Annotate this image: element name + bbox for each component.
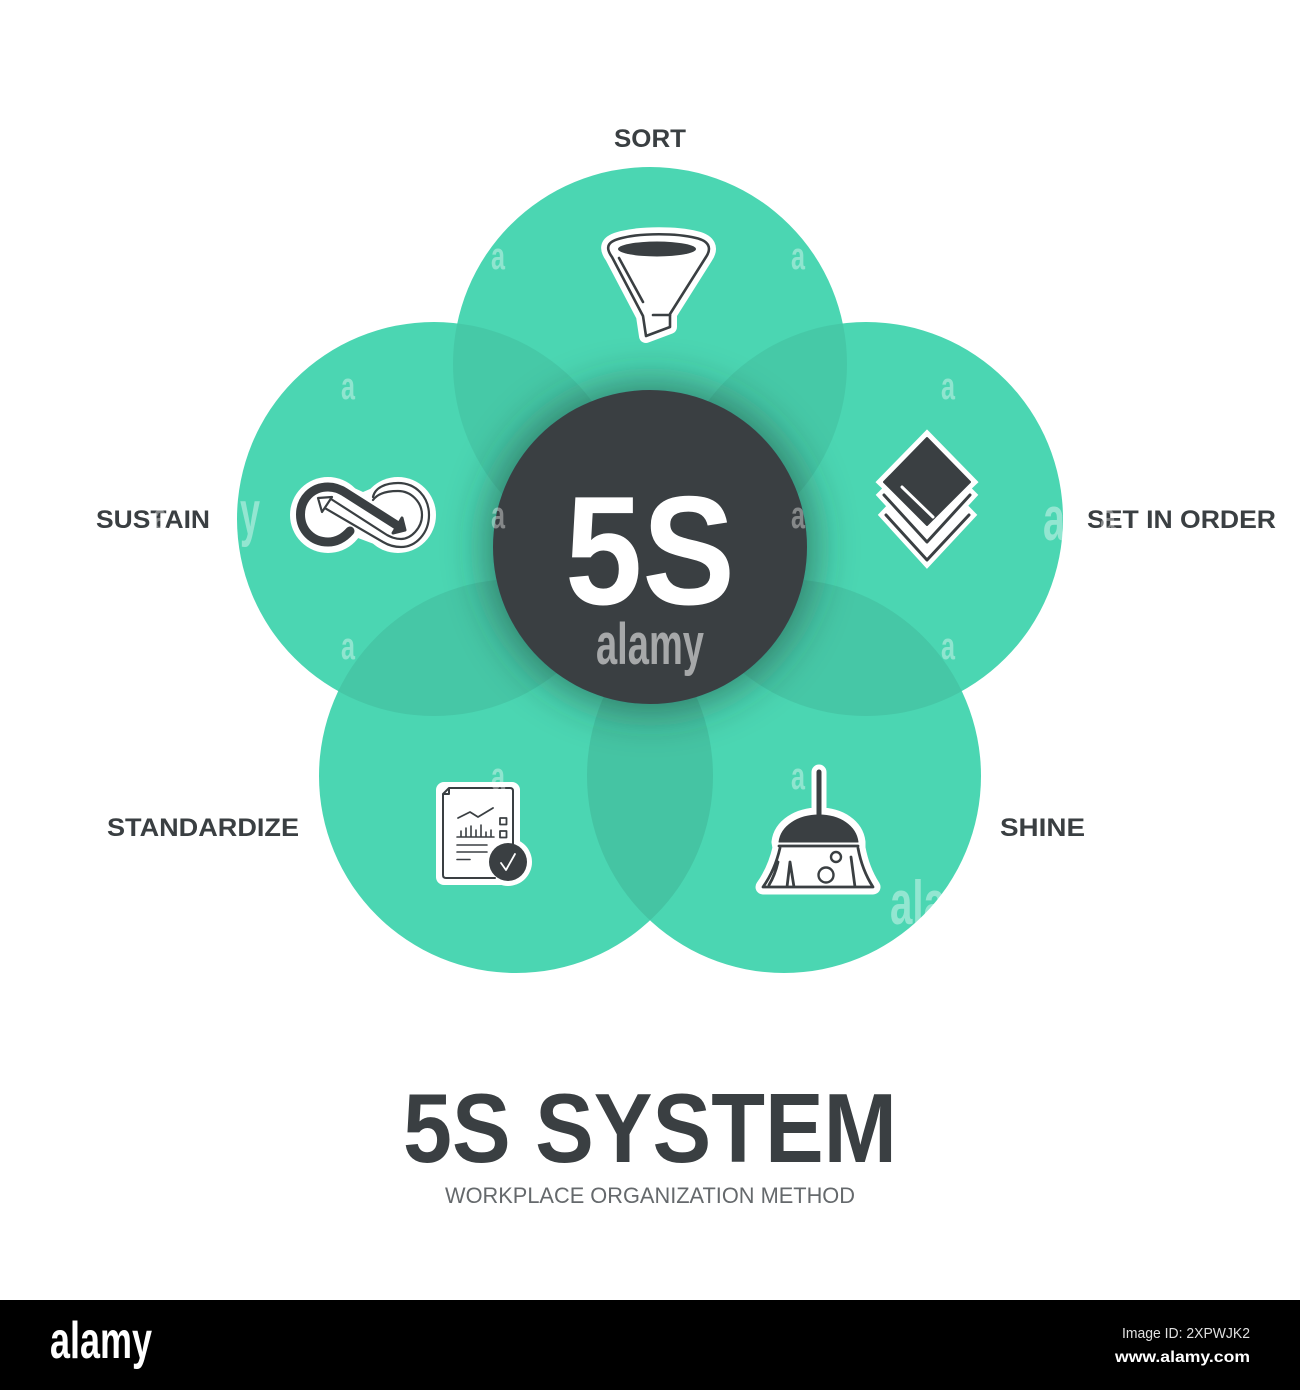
footer bar: [0, 1300, 1300, 1390]
watermark overlay: a: [791, 236, 806, 278]
subtitle: WORKPLACE ORGANIZATION METHOD: [445, 1183, 855, 1208]
label: standardize: STANDARDIZE: [107, 814, 299, 842]
icon: infinity loop with arrows: [290, 477, 436, 553]
centre hub circle: [493, 390, 807, 704]
overlap: standardize and sustain: [338, 580, 556, 716]
watermark overlay: alamy: [596, 612, 704, 677]
watermark overlay: y: [240, 479, 260, 548]
footer image id: Image ID: 2XPWJK2: [1122, 1325, 1250, 1342]
footer logo: alamy: [50, 1312, 152, 1370]
venn diagram of five petals: [237, 167, 1063, 973]
watermark overlay: a: [941, 626, 956, 668]
label: shine: SHINE: [1000, 814, 1085, 842]
overlap: sort and set in order: [709, 324, 847, 494]
petal: sustain: [237, 322, 631, 716]
label: sustain: SUSTAIN: [96, 506, 210, 534]
hub label 5S: 5S: [565, 464, 735, 637]
watermark overlay: a: [491, 756, 506, 798]
watermark overlay: a: [341, 626, 356, 668]
petal: shine: [587, 579, 981, 973]
watermark overlay: a: [941, 366, 956, 408]
watermark overlay: a: [791, 756, 806, 798]
watermark overlay: a: [491, 236, 506, 278]
petal: set in order: [669, 322, 1063, 716]
footer website: www.alamy.com: [1114, 1349, 1250, 1366]
icon: report document with check mark: [436, 782, 532, 886]
overlap: shine and standardize: [587, 697, 713, 920]
watermark overlay: [153, 236, 1117, 938]
petal: sort: [453, 167, 847, 561]
label: sort: SORT: [614, 125, 686, 153]
overlap: sustain and sort: [453, 324, 591, 494]
label: set in order: SET IN ORDER: [1087, 506, 1276, 534]
icon: broom: [763, 772, 873, 887]
watermark overlay: a: [791, 495, 806, 537]
title: 5S SYSTEM: [403, 1073, 897, 1183]
watermark overlay: a: [341, 366, 356, 408]
centre shadow: [484, 381, 816, 713]
watermark overlay: a: [1043, 485, 1065, 554]
watermark overlay: a: [1100, 497, 1117, 539]
icon: funnel: [608, 234, 709, 336]
watermark overlay: a: [491, 495, 506, 537]
watermark overlay: a: [153, 497, 168, 539]
icon: stacked layers: [884, 438, 970, 560]
petal: standardize: [319, 579, 713, 973]
overlap: set in order and shine: [744, 580, 962, 716]
watermark overlay: ala: [890, 869, 946, 938]
